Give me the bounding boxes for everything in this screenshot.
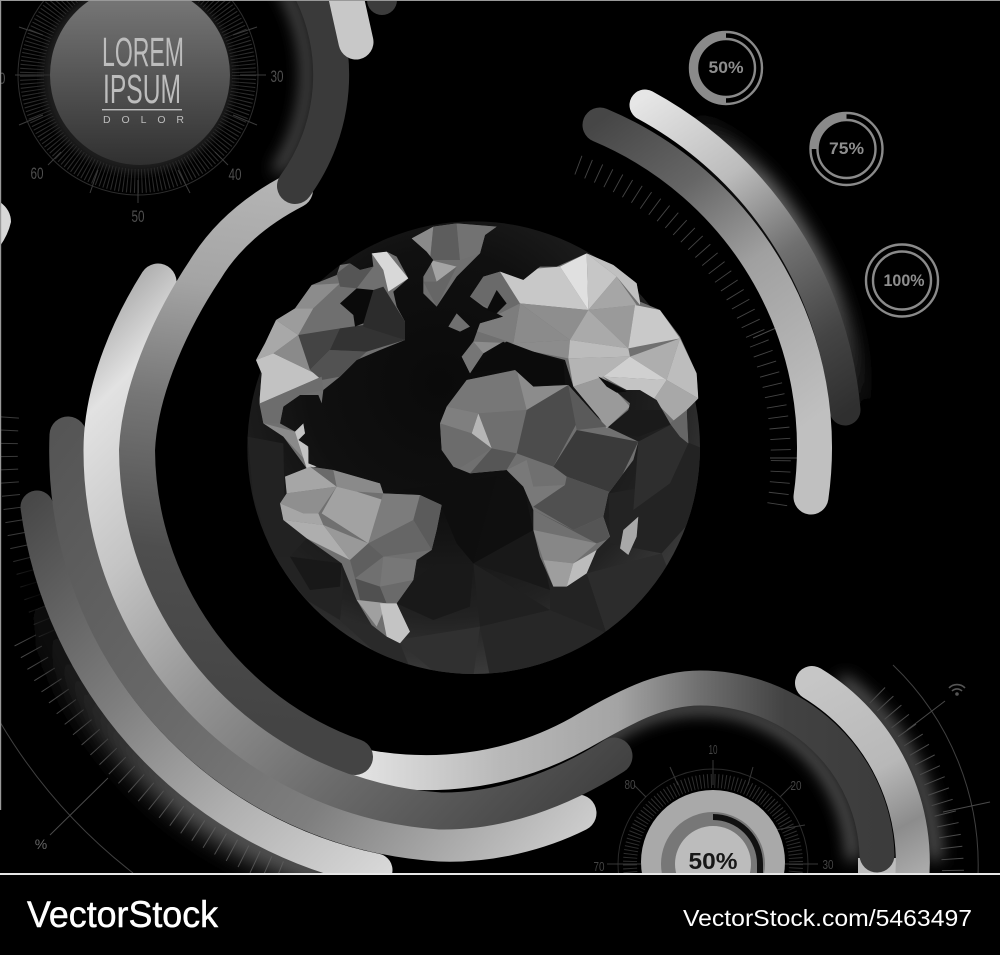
dial: bottom 50% gauge: 10 bbox=[708, 742, 718, 757]
icon: wifi bbox=[949, 685, 965, 695]
glow behind right light band bbox=[690, 125, 852, 400]
band: third lower-left bbox=[68, 435, 578, 843]
South America bbox=[285, 467, 337, 493]
footer: watermark bar: VectorStock.com/5463497 bbox=[683, 905, 972, 931]
footer: watermark bar: VectorStock bbox=[27, 894, 218, 935]
title: lorem ipsum dolor: DOLOR bbox=[103, 114, 184, 126]
ticks: right arc bbox=[578, 165, 798, 512]
cap: left edge light bbox=[0, 202, 11, 246]
dial: bottom 50% gauge: 70 bbox=[594, 859, 604, 874]
dial: bottom 50% gauge bbox=[594, 742, 834, 955]
title: lorem ipsum dolor: LOREM bbox=[102, 29, 184, 75]
band: main left S curve bbox=[137, 190, 355, 757]
Africa bbox=[447, 370, 517, 406]
gauge: 100% small bbox=[866, 244, 938, 316]
patch: light behind bottom-right cap bbox=[858, 858, 906, 874]
dial: top-left lorem ipsum bbox=[0, 0, 284, 226]
dial labels bbox=[0, 67, 284, 226]
footer: watermark bar bbox=[0, 873, 1000, 955]
tick arc: lower left dial bbox=[0, 417, 285, 875]
globe ocean base bbox=[240, 210, 710, 680]
dial labels: 60 bbox=[30, 164, 44, 183]
Mediterranean and seas bbox=[473, 290, 627, 393]
gauge: 100% small: 100% bbox=[884, 271, 924, 290]
gauge: 50% small: 50% bbox=[708, 58, 744, 77]
glow outside outer bottom-right band bbox=[840, 680, 935, 860]
band: right light to dark bbox=[645, 105, 845, 410]
glow behind outer left band bbox=[27, 560, 330, 875]
gauge: 75% small: 75% bbox=[829, 139, 864, 158]
dial labels: 50 bbox=[132, 207, 144, 226]
label: percent lower left: % bbox=[35, 836, 47, 852]
gauge: 50% small bbox=[690, 32, 762, 104]
dial labels: 30 bbox=[270, 67, 284, 86]
Europe / Asia bbox=[470, 272, 500, 297]
glow inside bottom-right arc bbox=[602, 707, 853, 860]
Greenland bbox=[412, 226, 434, 256]
dial labels: 40 bbox=[228, 165, 242, 184]
band: right dark to light bbox=[600, 125, 814, 497]
dial: bottom 50% gauge: 30 bbox=[822, 857, 834, 872]
band: outer lower-left bbox=[37, 507, 376, 870]
band: top-left dark arc bbox=[295, 0, 331, 186]
globe bbox=[240, 210, 710, 680]
dial: bottom 50% gauge: 80 bbox=[624, 777, 636, 792]
dial: bottom 50% gauge: 20 bbox=[790, 778, 802, 793]
dot: top dark bbox=[367, 0, 397, 15]
ticks: bottom-right outer dial bbox=[877, 665, 990, 875]
dial: bottom 50% gauge: 50% bbox=[688, 848, 738, 874]
title: lorem ipsum dolor: IPSUM bbox=[103, 66, 181, 112]
band: outer bottom right bbox=[812, 683, 913, 890]
band: S-curve bottom right bbox=[350, 688, 877, 855]
continent facets bbox=[256, 224, 698, 644]
Canada / USA bbox=[256, 320, 298, 360]
gauge: 75% small bbox=[810, 113, 882, 185]
band: top light cap bbox=[340, 0, 356, 42]
glow inside top-left dark band bbox=[268, 0, 307, 172]
title: lorem ipsum dolor bbox=[102, 29, 184, 126]
band: second lower-left ending in dark cap bbox=[102, 282, 614, 811]
